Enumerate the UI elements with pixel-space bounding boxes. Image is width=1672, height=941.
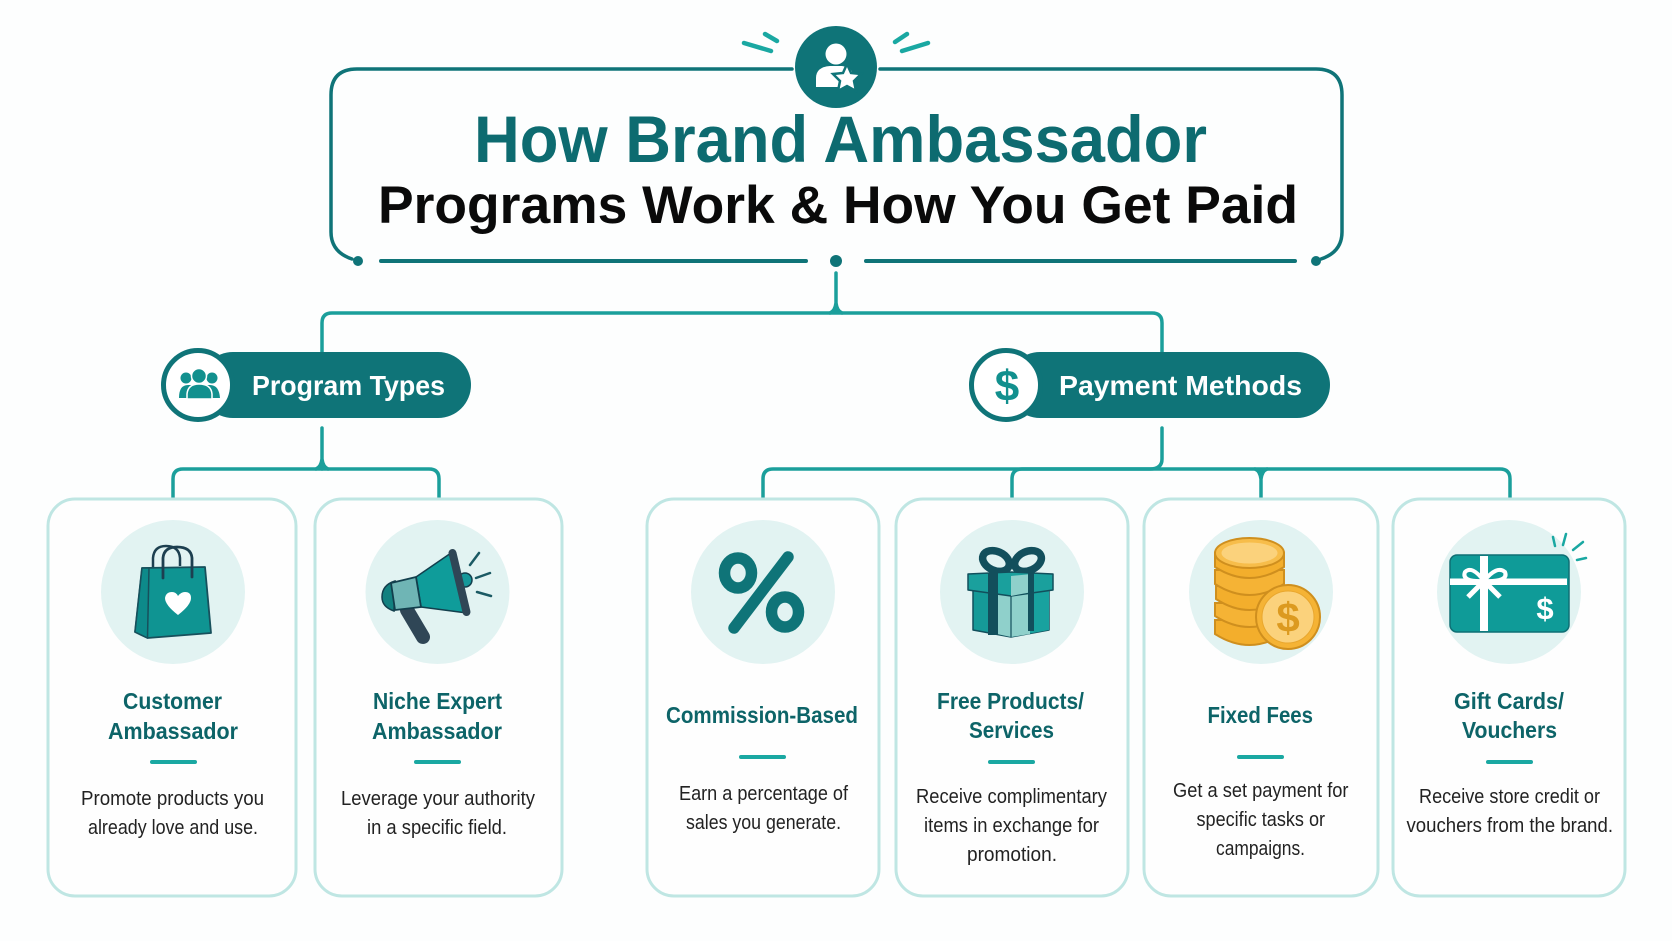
icon: dollar sign: $ [995,362,1019,411]
panel: Gift Cards/Vouchers: vouchers from the brand. [1406,815,1613,837]
icon: gift card [1450,534,1586,632]
panel: Niche Expert Ambassador: Leverage your authority [341,788,535,810]
panel: Commission-Based: Commission-Based [666,702,858,728]
panel: Customer Ambassador: Customer [123,688,222,714]
panel: Fixed Fees: Fixed Fees [1208,702,1313,728]
panel: Fixed Fees: Get a set payment for [1173,780,1349,802]
heading pill: Payment Methods [972,350,1330,420]
panel: Free Products/Services [896,499,1128,896]
panel: Commission-Based: sales you generate. [686,812,841,834]
icon: gift box [968,547,1053,637]
title: Programs Work & How You Get Paid [378,176,1298,235]
panel: Fixed Fees: specific tasks or [1196,809,1325,831]
icon: ambassador badge [744,26,928,108]
title frame [331,69,1342,267]
heading pill: Payment Methods: Payment Methods [1059,370,1302,401]
panel: Customer Ambassador [48,499,296,896]
panel: Free Products/Services: items in exchange for [924,815,1099,837]
panel: Fixed Fees: campaigns. [1216,838,1305,860]
panel: Fixed Fees [1144,499,1378,896]
panel: Free Products/Services: Receive complimentary [916,786,1107,808]
panel: Niche Expert Ambassador [315,499,562,896]
panel: Gift Cards/Vouchers [1393,499,1625,896]
panel: Customer Ambassador: Promote products you [81,788,264,810]
panel: Gift Cards/Vouchers: Gift Cards/ [1454,688,1565,714]
connector lines [173,273,1510,499]
panel: Free Products/Services: Free Products/ [937,688,1085,714]
panel: Commission-Based: Earn a percentage of [679,783,848,805]
title: How Brand Ambassador [474,102,1207,176]
panel: Gift Cards/Vouchers: Receive store credit or [1419,786,1600,808]
panel: Niche Expert Ambassador: in a specific field. [367,817,507,839]
panel: Free Products/Services: Services [969,717,1054,743]
panel: Gift Cards/Vouchers: Vouchers [1462,717,1557,743]
panel: Customer Ambassador: already love and use. [88,817,258,839]
panel: Customer Ambassador: Ambassador [108,718,238,744]
icon: coin stack [1215,538,1320,649]
icon: group of people [179,368,220,399]
heading pill: Program Types: Program Types [252,370,445,401]
panel: Niche Expert Ambassador: Niche Expert [373,688,502,714]
icon: megaphone [382,553,491,637]
heading pill: Program Types [164,350,471,420]
icon: percent [724,557,798,628]
panel: Niche Expert Ambassador: Ambassador [372,718,502,744]
panel: Free Products/Services: promotion. [967,844,1057,866]
panel: Fixed Fees: $ [1276,594,1300,641]
panel: Commission-Based [647,499,879,896]
icon: shopping bag [135,546,211,638]
title [378,102,1298,235]
icon: gift card: $ [1536,591,1554,626]
